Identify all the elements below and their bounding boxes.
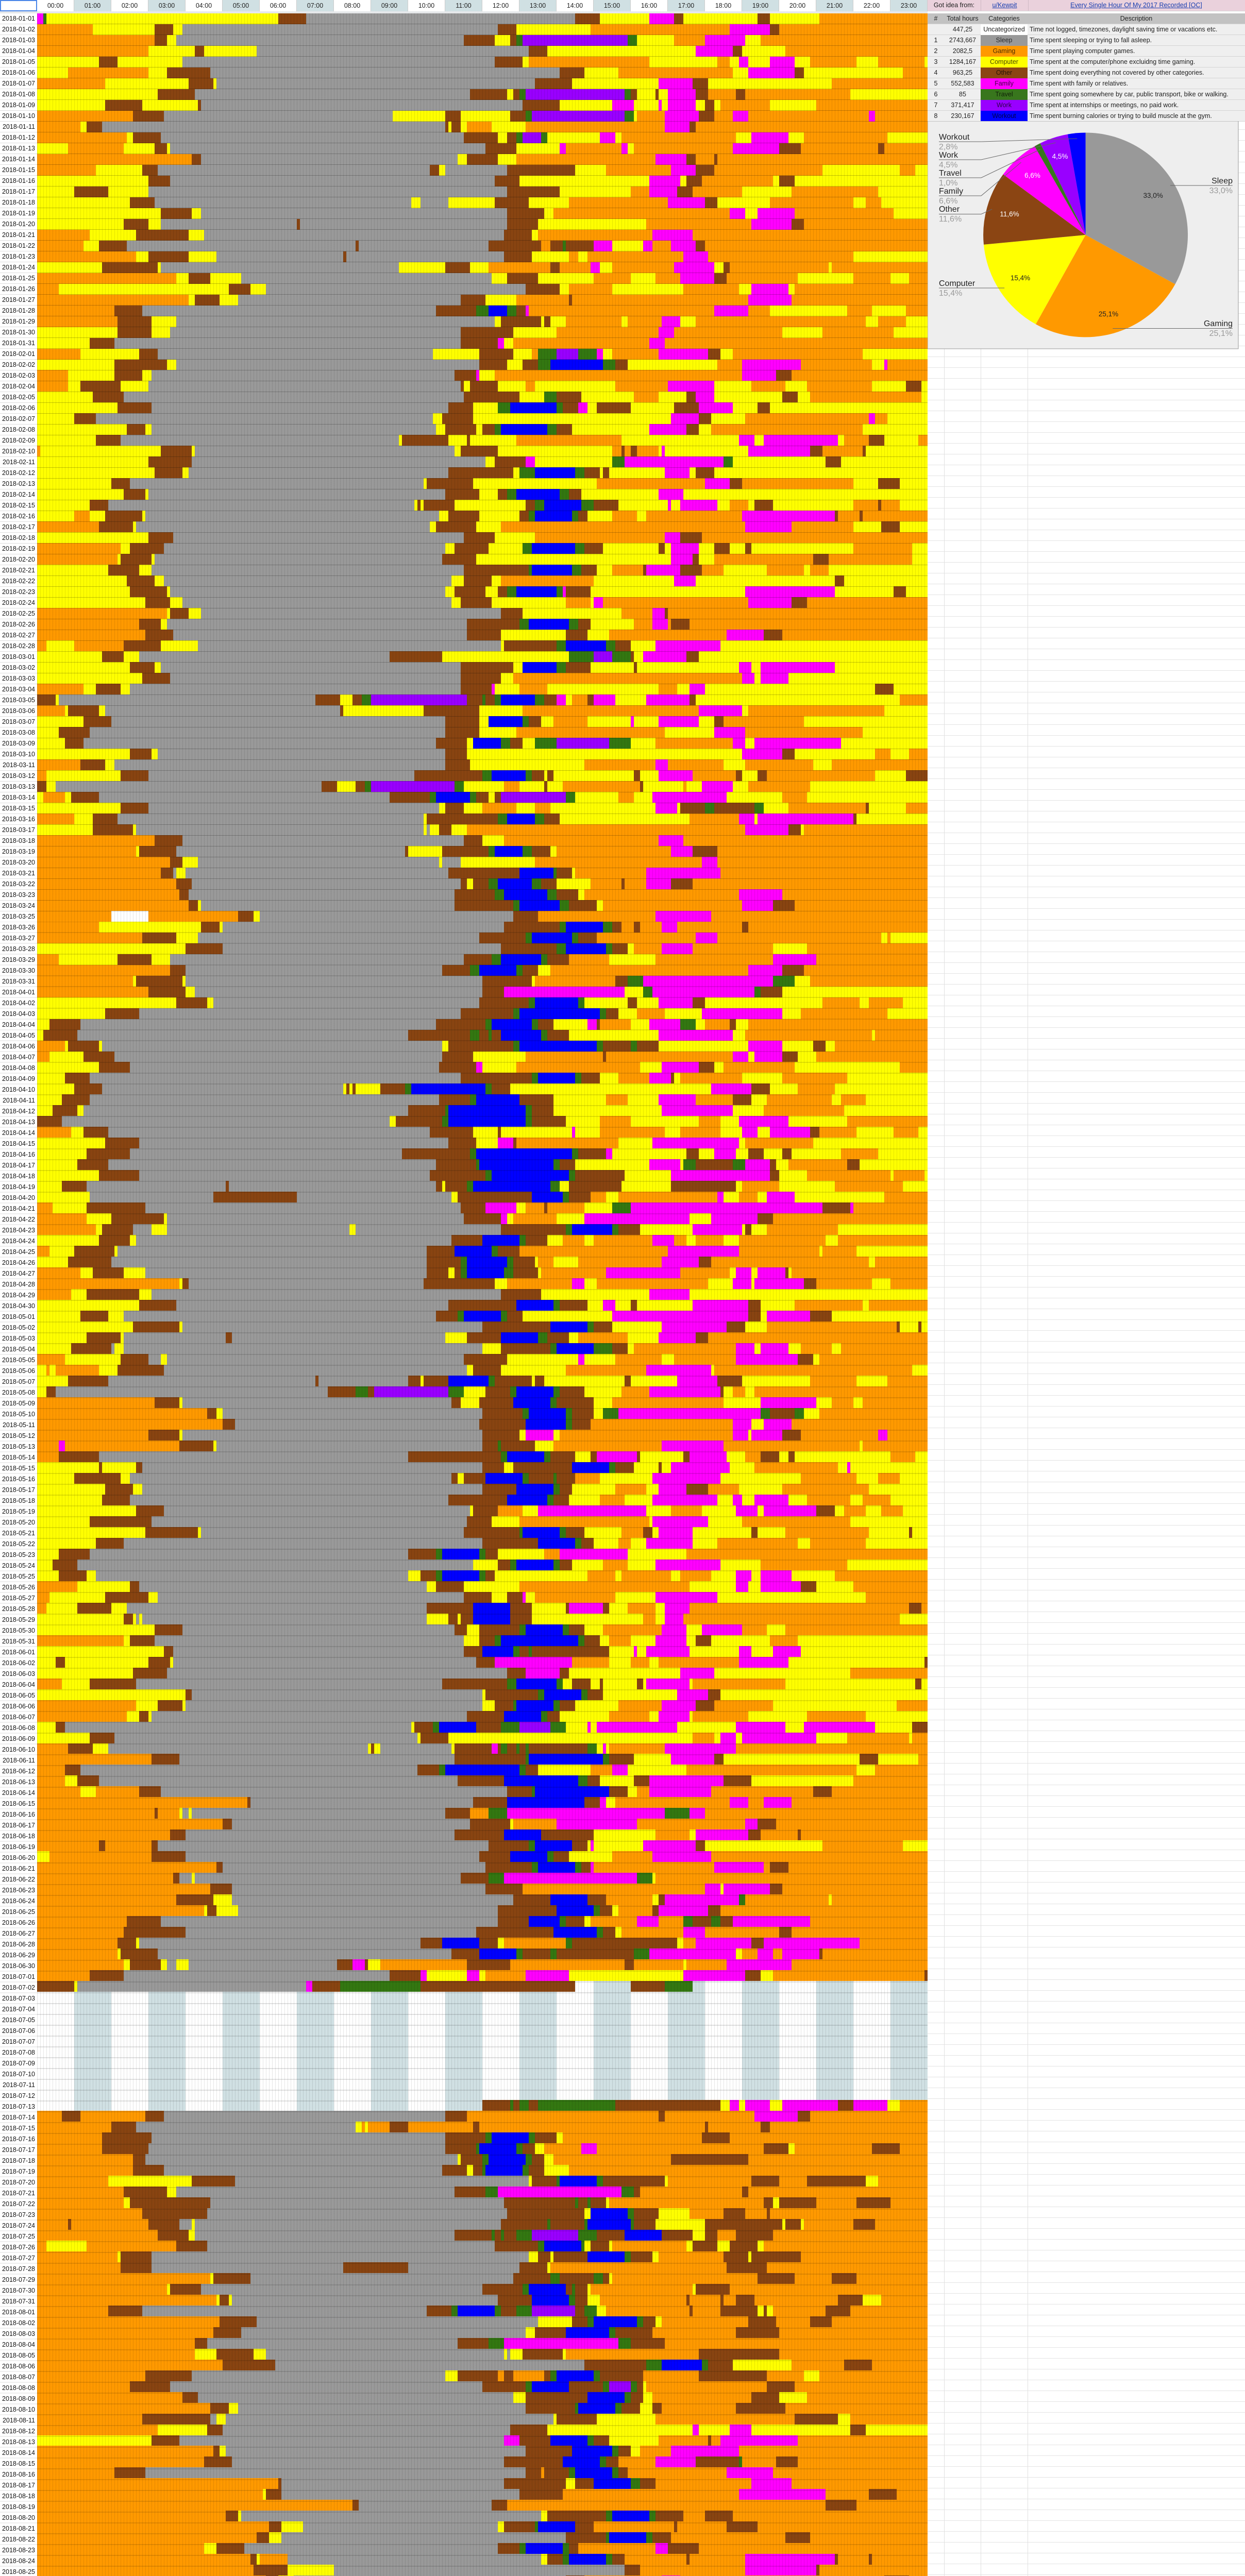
row: family: Time spent with family or relatives. [1030, 80, 1128, 87]
time-of-day header: 21:00 [827, 2, 843, 9]
category name and percentage labels [939, 133, 1233, 338]
row: other: 4 [934, 69, 937, 76]
row: sleep: 1 [934, 37, 937, 44]
time-of-day header: 23:00 [901, 2, 917, 9]
row: gaming: Time spent playing computer games. [1030, 47, 1135, 55]
row: computer: Time spent at the computer/phone excluidng time gaming. [1030, 58, 1195, 65]
row: computer [928, 57, 1245, 67]
slice value labels [1000, 152, 1163, 318]
slice value labels: 11,6% [1000, 210, 1019, 218]
time-of-day header: 15:00 [604, 2, 620, 9]
time-of-day header: 05:00 [233, 2, 249, 9]
slice value labels: 33,0% [1143, 192, 1163, 199]
time-of-day header: 18:00 [715, 2, 731, 9]
daily activity timeline chart: one row per day, 5-minute resolution [37, 13, 928, 2576]
time-of-day header: 02:00 [122, 2, 138, 9]
credit row: Got idea from: [934, 2, 974, 9]
row: travel [928, 89, 1245, 100]
row: travel: 6 [934, 91, 937, 98]
row: family: 5 [934, 80, 937, 87]
time-of-day header: 17:00 [678, 2, 694, 9]
row: workout: Time spent burning calories or trying to build muscle at the gym. [1030, 112, 1212, 120]
category name and percentage labels: Work [939, 151, 958, 160]
row: workout: 8 [934, 112, 937, 120]
time-of-day header: 06:00 [270, 2, 286, 9]
category name and percentage labels: 25,1% [1209, 329, 1233, 338]
category name and percentage labels: 6,6% [939, 197, 957, 206]
category name and percentage labels: 33,0% [1209, 187, 1233, 195]
category name and percentage labels: Family [939, 187, 963, 196]
category name and percentage labels: Gaming [1204, 319, 1233, 328]
category name and percentage labels: 1,0% [939, 179, 957, 188]
row: other: 963,25 [953, 69, 972, 76]
time-of-day header: 13:00 [530, 2, 546, 9]
time-of-day header: 04:00 [196, 2, 212, 9]
row: sleep: Sleep [996, 37, 1012, 44]
row: computer: Computer [990, 58, 1018, 65]
time-of-day header: 03:00 [159, 2, 175, 9]
time-of-day header: 10:00 [418, 2, 434, 9]
row: computer: 3 [934, 58, 937, 65]
category name and percentage labels: Other [939, 205, 960, 214]
row: uncategorized: Uncategorized [983, 26, 1025, 33]
row: computer: 1284,167 [949, 58, 976, 65]
slice value labels: 15,4% [1011, 274, 1030, 282]
row: gaming: 2082,5 [953, 47, 972, 55]
row: sleep: 2743,667 [949, 37, 976, 44]
row: family: 552,583 [951, 80, 974, 87]
row: work: 7 [934, 101, 937, 109]
time-of-day header: 16:00 [641, 2, 657, 9]
slice value labels: 25,1% [1099, 310, 1118, 318]
category name and percentage labels: 15,4% [939, 289, 962, 298]
row: other: Other [996, 69, 1012, 76]
credit row: Every Single Hour Of My 2017 Recorded [OC] [1070, 2, 1202, 9]
row: travel: Time spent going somewhere by car, public transport, bike or walking. [1030, 91, 1229, 98]
row: work: Time spent at internships or meetings, no paid work. [1030, 101, 1179, 109]
time-of-day header: 11:00 [456, 2, 472, 9]
slice value labels: 6,6% [1024, 172, 1040, 179]
row: travel: 85 [959, 91, 966, 98]
row: uncategorized [928, 24, 1245, 35]
slice value labels: 4,5% [1052, 152, 1068, 160]
table header: Total hours [947, 15, 979, 22]
row: sleep: Time spent sleeping or trying to fall asleep. [1030, 37, 1152, 44]
category name and percentage labels: Sleep [1212, 177, 1233, 185]
row: work: 371,417 [951, 101, 974, 109]
row: work [928, 100, 1245, 111]
row: gaming: Gaming [993, 47, 1015, 55]
time-of-day header: 14:00 [567, 2, 583, 9]
pie chart: share of logged hours per category [928, 121, 1239, 349]
category name and percentage labels: 2,8% [939, 143, 957, 151]
time-of-day header: 08:00 [344, 2, 360, 9]
panel: categories legend table and pie chart [928, 0, 1245, 2576]
row: gaming [928, 46, 1245, 57]
time-of-day header: 20:00 [789, 2, 805, 9]
credit row: u/Kewpit [992, 2, 1017, 9]
time-of-day header: 12:00 [493, 2, 509, 9]
row: travel: Travel [995, 91, 1013, 98]
row: workout: 230,167 [951, 112, 974, 120]
time-of-day header [0, 0, 1245, 13]
time-of-day header: 22:00 [864, 2, 880, 9]
row: workout: Workout [992, 112, 1016, 120]
row: sleep [928, 35, 1245, 46]
category name and percentage labels: 11,6% [939, 215, 962, 224]
table header: # [934, 15, 937, 22]
category name and percentage labels: Travel [939, 169, 962, 178]
credit row [928, 0, 1245, 11]
category name and percentage labels: Workout [939, 133, 970, 142]
table header [928, 13, 1245, 24]
row: uncategorized: 447,25 [953, 26, 972, 33]
time-of-day header: 19:00 [752, 2, 768, 9]
row: family [928, 78, 1245, 89]
time-of-day header: 09:00 [381, 2, 397, 9]
time-of-day header: 01:00 [85, 2, 100, 9]
table header: Categories [988, 15, 1020, 22]
time-of-day header: 00:00 [47, 2, 63, 9]
category name and percentage labels: 4,5% [939, 161, 957, 170]
row: other: Time spent doing everything not covered by other categories. [1030, 69, 1204, 76]
category name and percentage labels: Computer [939, 279, 975, 288]
time-of-day header: 07:00 [307, 2, 323, 9]
table header: Description [1120, 15, 1152, 22]
row: uncategorized: Time not logged, timezones, daylight saving time or vacations etc. [1030, 26, 1217, 33]
row: workout [928, 111, 1245, 122]
leader lines [939, 139, 1233, 329]
row: family: Family [995, 80, 1014, 87]
row: gaming: 2 [934, 47, 937, 55]
row: other [928, 67, 1245, 78]
row: work: Work [997, 101, 1012, 109]
